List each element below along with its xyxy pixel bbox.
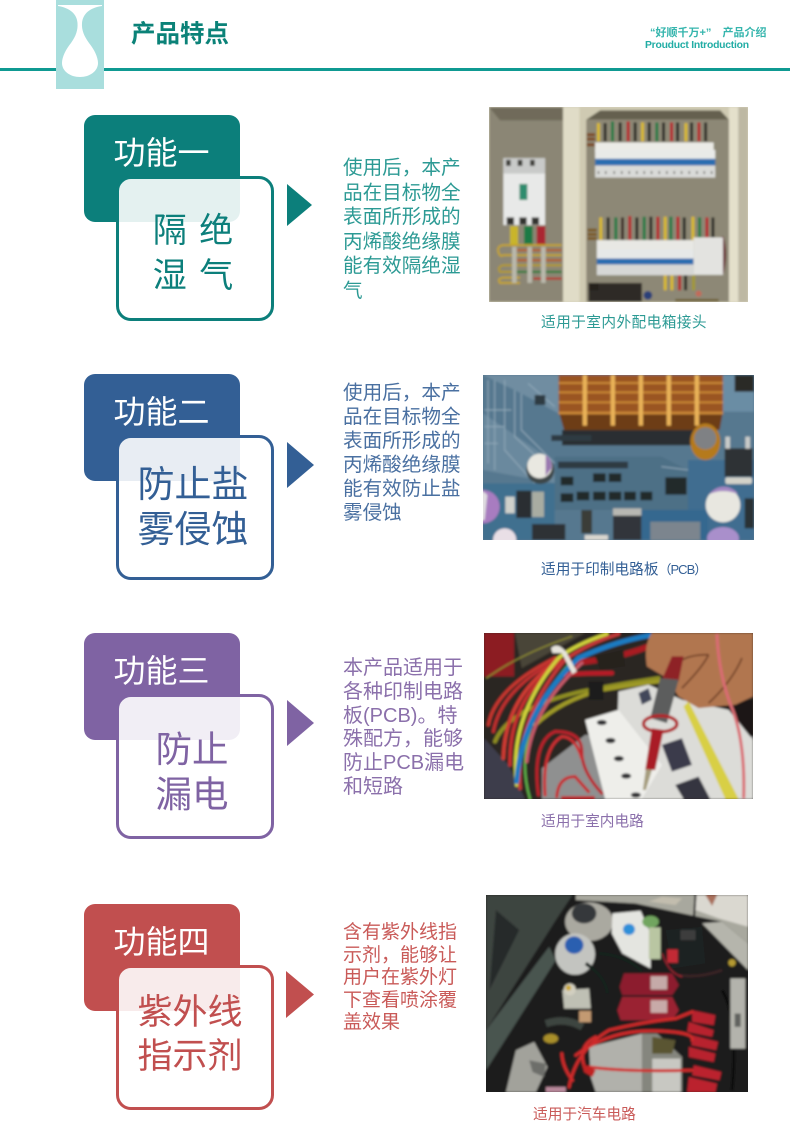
caption: function 3: 适用于室内电路 — [541, 814, 644, 830]
text block: function 4: 盖效果 — [343, 1012, 400, 1033]
text block: function 3: 本产品适用于 — [343, 657, 463, 679]
icon: vase on pale teal tab — [56, 0, 104, 89]
card title: 雾侵蚀 — [138, 509, 248, 550]
arrow: function 1 — [287, 184, 312, 226]
panel: function 3 label card — [84, 633, 240, 740]
card heading: 功能二 — [114, 394, 210, 430]
card heading: 功能四 — [114, 924, 210, 960]
panel: function 3 title card — [116, 694, 274, 839]
text block: function 3: 和短路 — [343, 776, 403, 798]
photo: distribution box — [489, 107, 748, 302]
card title: 紫外线 — [137, 993, 242, 1032]
card title: 漏电 — [156, 774, 228, 815]
text block: function 2: 使用后，本产 — [343, 382, 461, 404]
card title: 隔 绝 — [153, 212, 233, 250]
text block: function 1: 丙烯酸绝缘膜 — [343, 230, 461, 252]
card title — [137, 993, 242, 1076]
photo: testing indoor wiring — [484, 633, 753, 799]
text block: function 1: 气 — [343, 280, 363, 302]
text block: function 4 — [343, 922, 457, 1033]
text block: function 3 — [343, 657, 464, 798]
text block: function 2: 雾侵蚀 — [343, 502, 402, 524]
card title: 指示剂 — [137, 1036, 242, 1076]
text block: function 3: 殊配方，能够 — [343, 728, 463, 750]
header label: Chinese: “好顺千万+” 产品介绍 — [650, 27, 766, 39]
text block: function 1: 品在目标物全 — [343, 182, 461, 204]
text block: function 2: 丙烯酸绝缘膜 — [343, 454, 461, 476]
photo: car engine bay — [486, 895, 748, 1092]
text block: function 3: 防止PCB漏电 — [343, 752, 464, 774]
panel: function 1 label card — [84, 115, 240, 222]
caption: function 4: 适用于汽车电路 — [533, 1107, 636, 1123]
text block: function 2: 表面所形成的 — [343, 430, 461, 452]
text block: function 4: 示剂，能够让 — [343, 944, 457, 966]
text block: function 3: 各种印制电路 — [343, 681, 463, 703]
caption: function 2: 适用于印制电路板（PCB） — [541, 562, 706, 578]
card heading: 功能三 — [114, 653, 210, 689]
photo: printed circuit board — [483, 375, 754, 540]
text block: function 1 — [343, 157, 461, 302]
arrow: function 2 — [287, 442, 314, 488]
text block: function 1: 能有效隔绝湿 — [343, 255, 461, 277]
card title — [138, 464, 248, 550]
text block: function 1: 表面所形成的 — [343, 206, 461, 228]
text block: function 2: 品在目标物全 — [343, 406, 461, 428]
header band — [0, 0, 790, 89]
card heading: 功能一 — [114, 135, 210, 171]
panel: function 2 title card — [116, 435, 274, 580]
arrow: function 3 — [287, 700, 314, 746]
text block: function 4: 下查看喷涂覆 — [343, 990, 457, 1010]
panel: function 4 title card — [116, 965, 274, 1110]
text block: function 4: 含有紫外线指 — [343, 922, 457, 943]
text block: function 3: 板(PCB)。特 — [343, 705, 457, 727]
caption: function 1: 适用于室内外配电箱接头 — [541, 315, 707, 331]
header rule — [0, 68, 790, 71]
card title: 湿 气 — [153, 257, 233, 295]
panel: function 2 label card — [84, 374, 240, 481]
card title — [153, 212, 233, 295]
header label: English: Prouduct Introduction — [645, 40, 749, 51]
text block: function 2 — [343, 382, 461, 524]
arrow: function 4 — [286, 971, 314, 1018]
card title: 防止 — [156, 729, 228, 770]
title: 产品特点 — [131, 21, 229, 48]
card title — [156, 729, 228, 815]
text block: function 2: 能有效防止盐 — [343, 478, 461, 500]
panel: function 4 label card — [84, 904, 240, 1011]
text block: function 4: 用户在紫外灯 — [343, 967, 457, 988]
text block: function 1: 使用后，本产 — [343, 157, 461, 179]
card title: 防止盐 — [138, 464, 248, 505]
panel: function 1 title card — [116, 176, 274, 321]
